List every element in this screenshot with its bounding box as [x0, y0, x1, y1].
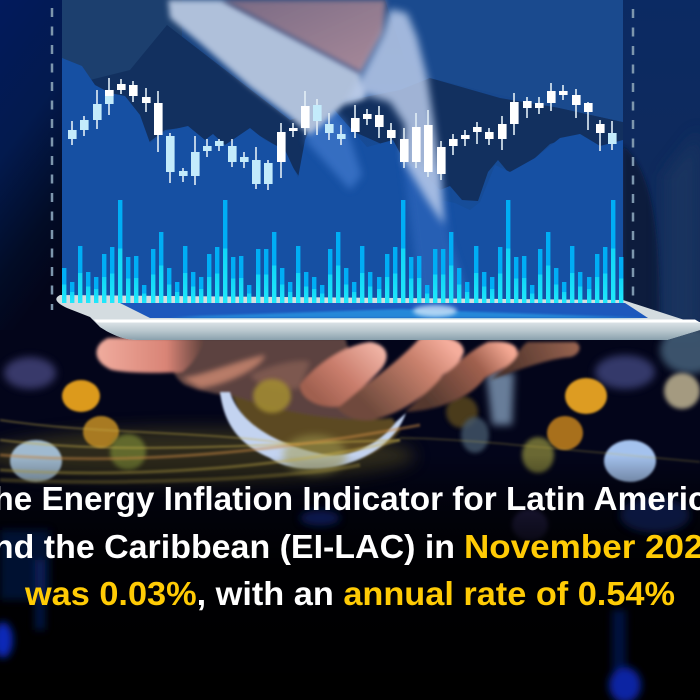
bokeh lights — [0, 355, 700, 541]
tablet white edge line — [94, 320, 700, 322]
golden light streaks — [0, 420, 700, 482]
palm highlight — [182, 355, 265, 388]
candle wicks — [72, 78, 612, 190]
light candle bodies — [68, 90, 617, 184]
collar right wing — [345, 9, 444, 225]
headline line 3: was 0.03%, with an annual rate of 0.54% — [24, 575, 675, 612]
dashed guide lines — [52, 8, 633, 310]
businessman hand — [96, 337, 580, 464]
candlestick chart — [68, 78, 617, 190]
volume bar chart — [62, 200, 623, 303]
finger two — [335, 337, 464, 420]
screen glare — [413, 305, 457, 317]
lower fade to black — [0, 455, 700, 700]
shirt collar left — [168, 0, 365, 135]
neck skin — [222, 0, 386, 73]
white candle bodies — [105, 84, 605, 174]
area chart, blue mountain — [62, 58, 623, 238]
headline line 2 — [0, 528, 700, 565]
palm — [170, 338, 375, 430]
chart panel with businessman backdrop — [62, 0, 623, 305]
thumb — [96, 338, 205, 373]
tablet screen — [120, 303, 648, 318]
shirt cuff — [220, 392, 406, 469]
bokeh on the palm — [253, 379, 347, 475]
tablet bezel — [56, 295, 700, 340]
tie reflection — [305, 100, 362, 190]
finger four — [490, 342, 580, 380]
tablet — [56, 295, 700, 340]
tie highlight behind hand — [486, 372, 514, 425]
finger three — [405, 342, 517, 412]
suit and shirt shadow — [62, 25, 623, 201]
golden palm shadow under hand — [232, 395, 400, 464]
upper right panel tint — [385, 0, 623, 122]
suit lapel, upper left — [62, 0, 182, 80]
headline text — [0, 480, 700, 612]
lower blue glints — [0, 497, 690, 700]
tablet lower edge — [97, 322, 700, 340]
finger one — [300, 342, 387, 407]
